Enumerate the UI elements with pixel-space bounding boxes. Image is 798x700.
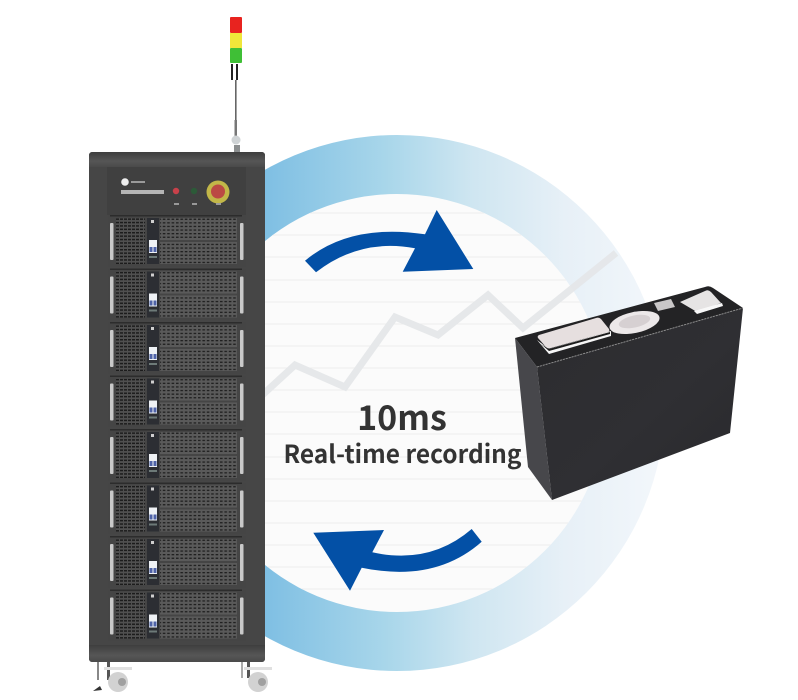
inner circle panel [188, 194, 606, 612]
logo [121, 178, 164, 194]
battery front face [537, 308, 743, 500]
heading: 10ms: 10ms [357, 391, 447, 440]
battery left face [515, 338, 552, 500]
caster left [93, 662, 132, 692]
large terminal [537, 318, 611, 354]
cabinet body [89, 152, 265, 662]
front panel [107, 167, 246, 215]
line chart trace [258, 253, 616, 399]
label: Real-time recording: Real-time recording [284, 435, 522, 471]
battery top face [515, 286, 743, 367]
small terminal [680, 290, 723, 314]
emergency stop button [206, 180, 230, 205]
arrow: bottom, to the cabinet [313, 529, 482, 591]
arrow: top, to the battery [305, 210, 473, 272]
module rows [108, 215, 246, 642]
signal tower [230, 17, 242, 152]
top bar [89, 152, 265, 167]
caster right [241, 662, 272, 692]
indicator: red [173, 188, 179, 205]
vent oval [607, 307, 662, 338]
test cabinet [89, 17, 272, 692]
fill port [654, 299, 675, 311]
battery cell [515, 286, 743, 500]
background ring [265, 135, 658, 671]
bottom bar [89, 645, 265, 662]
indicator: green [191, 188, 197, 205]
